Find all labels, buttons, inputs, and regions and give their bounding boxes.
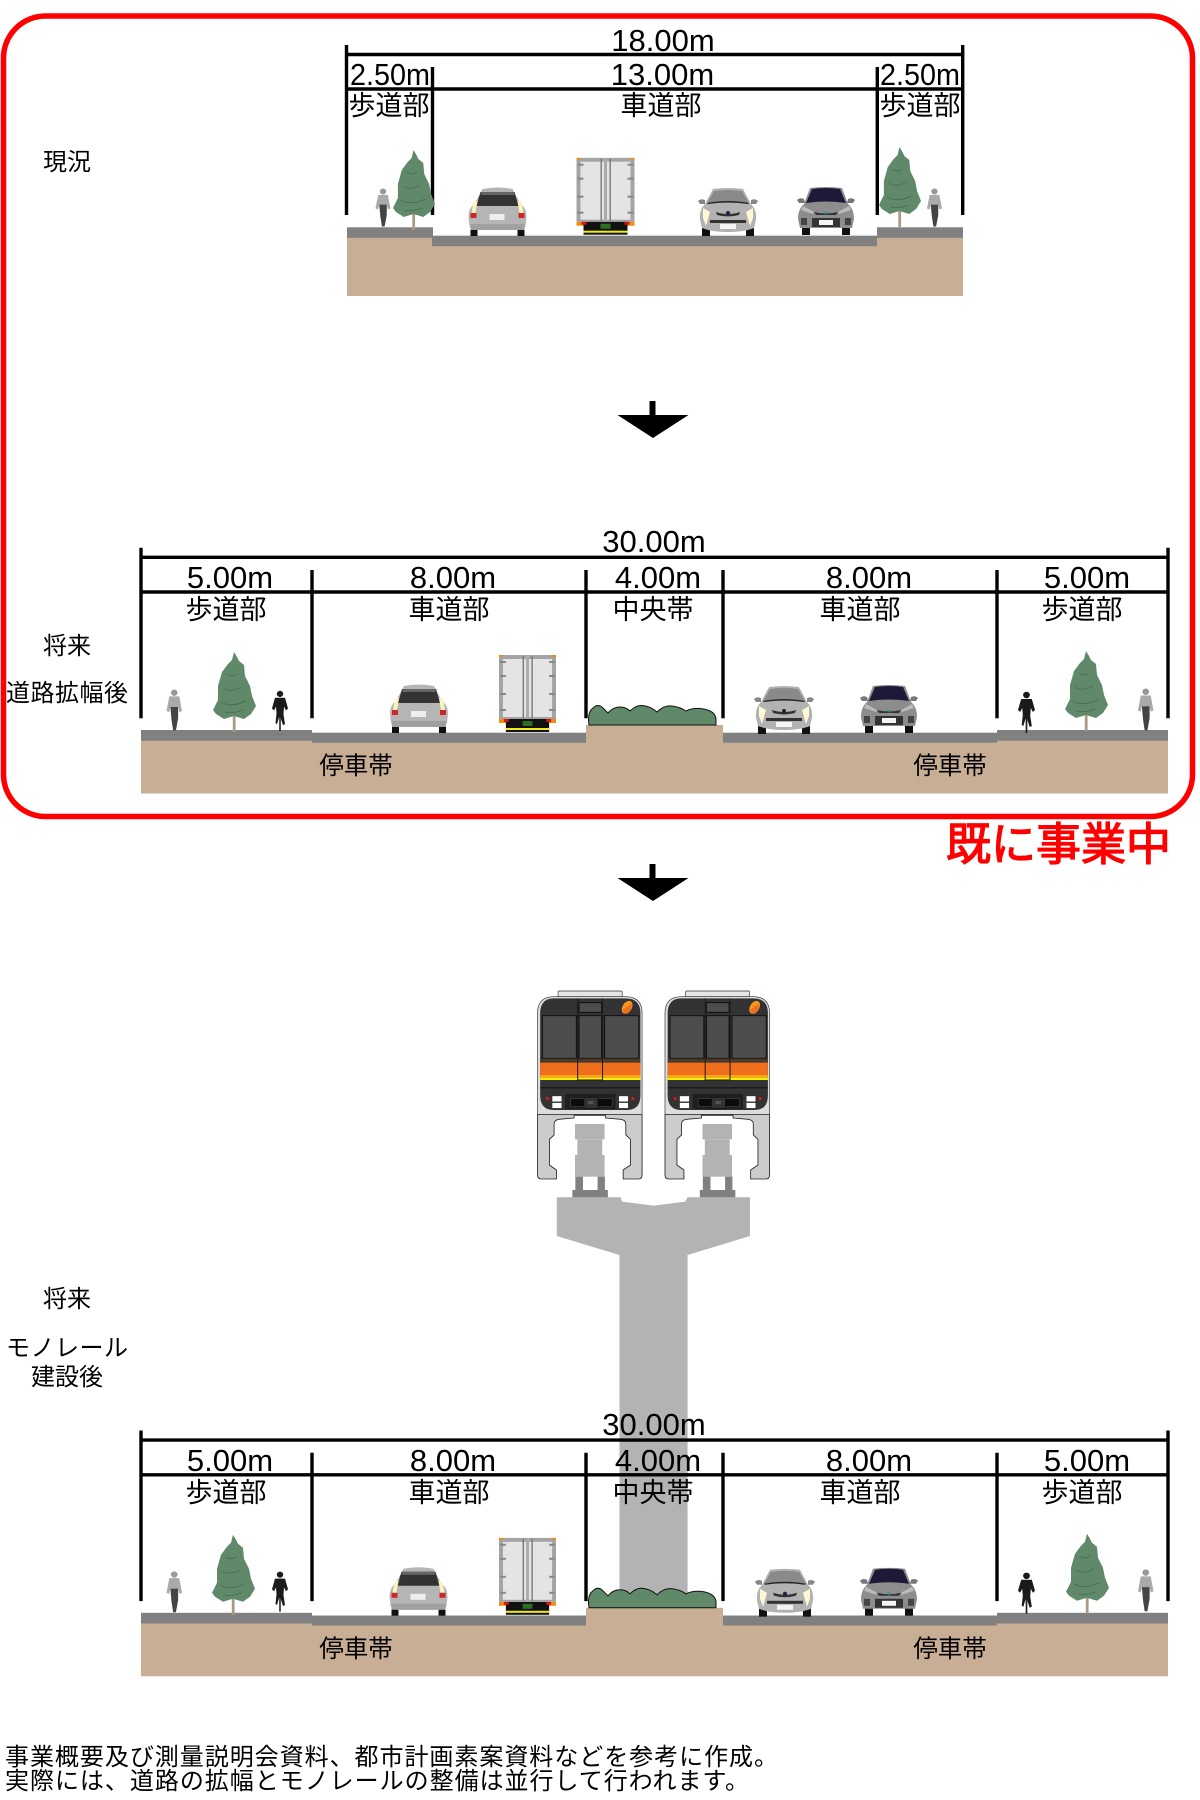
median shrubs	[588, 705, 716, 725]
arrow: widened to monorail	[618, 864, 688, 901]
dimension: median: 4.00m	[615, 560, 701, 595]
pier and pillar	[557, 1197, 750, 1607]
pedestrian	[376, 188, 390, 227]
car rear view	[468, 188, 526, 236]
footer note	[5, 1737, 778, 1796]
label: right stopping lane: 停車帯	[913, 747, 987, 782]
tree	[212, 1535, 255, 1615]
dimension: right carriageway: 8.00m	[826, 1443, 912, 1478]
tree	[1065, 651, 1108, 731]
footer line 2: 実際には、道路の拡幅とモノレールの整備は並行して行われます。	[5, 1761, 749, 1796]
footer line 1: 事業概要及び測量説明会資料、都市計画素案資料などを参考に作成。	[5, 1737, 778, 1772]
pedestrian	[927, 188, 942, 227]
dimension: right sidewalk: 5.00m	[1044, 1443, 1130, 1478]
cyclist	[272, 1572, 288, 1612]
truck	[499, 1538, 556, 1615]
dimension: median: 4.00m	[615, 1443, 701, 1478]
car front dark	[797, 187, 855, 235]
dimension: left sidewalk: 2.50m	[350, 57, 430, 92]
label: left carriageway: 車道部	[408, 1471, 490, 1510]
dimension: right sidewalk: 2.50m	[880, 57, 960, 92]
car rear view	[390, 684, 448, 733]
truck	[576, 158, 634, 235]
red outline: project already under way	[4, 16, 1192, 816]
ground and paving	[141, 1608, 1168, 1676]
dimension: left carriageway: 8.00m	[410, 1443, 496, 1478]
pedestrian	[166, 690, 182, 730]
section: current road	[43, 23, 963, 296]
left train	[538, 991, 642, 1197]
dimension: carriageway: 13.00m	[611, 57, 714, 92]
truck	[499, 655, 556, 732]
label: left sidewalk: 歩道部	[186, 1471, 266, 1510]
dimension lines	[141, 548, 1168, 718]
label: after widening: 道路拡幅後	[6, 673, 128, 708]
label: right sidewalk: 歩道部	[1042, 588, 1122, 627]
cyclist	[1018, 1573, 1035, 1614]
label: right carriageway: 車道部	[820, 588, 900, 627]
dimension: total width: 18.00m	[611, 23, 715, 58]
section: future with monorail	[6, 1279, 1168, 1676]
ground and paving	[141, 725, 1168, 794]
label: median: 中央帯	[612, 1471, 694, 1510]
label: left sidewalk: 歩道部	[348, 84, 430, 123]
label: carriageway: 車道部	[620, 84, 702, 123]
tree	[213, 652, 256, 732]
label: after construction: 建設後	[31, 1357, 103, 1392]
tree	[1066, 1534, 1109, 1614]
arrow: current to widened	[618, 401, 688, 438]
label: future: 将来	[43, 1279, 91, 1314]
label: median: 中央帯	[612, 588, 694, 627]
dimension lines	[141, 1430, 1168, 1601]
car front dark	[860, 1568, 918, 1616]
dimension: right carriageway: 8.00m	[826, 560, 912, 595]
monorail trains and pier	[538, 991, 770, 1607]
label: future: 将来	[43, 626, 91, 661]
label: left stopping lane: 停車帯	[319, 747, 393, 782]
pedestrian	[1138, 689, 1154, 730]
section: future widened road	[6, 524, 1168, 794]
cyclist	[272, 691, 288, 731]
dimension: total width: 30.00m	[602, 1407, 706, 1442]
label: right sidewalk: 歩道部	[1042, 1471, 1122, 1510]
dimension: total width: 30.00m	[602, 524, 706, 559]
label: left stopping lane: 停車帯	[319, 1630, 393, 1665]
label: current state: 現況	[43, 142, 91, 177]
pedestrian	[1138, 1569, 1154, 1611]
label: left carriageway: 車道部	[408, 588, 490, 627]
road cross-section	[141, 1407, 1168, 1676]
dimension lines	[346, 45, 963, 215]
car front dark	[860, 685, 918, 733]
median shrubs	[588, 1588, 716, 1608]
label: right carriageway: 車道部	[820, 1471, 900, 1510]
label: right stopping lane: 停車帯	[913, 1630, 987, 1665]
dimension: right sidewalk: 5.00m	[1044, 560, 1130, 595]
callout: already under way: 既に事業中	[946, 808, 1171, 873]
label: monorail: モノレール	[6, 1328, 128, 1363]
tree	[879, 147, 921, 227]
ground and paving	[347, 227, 963, 296]
car rear view	[390, 1567, 448, 1616]
cyclist	[1018, 692, 1035, 733]
right train	[665, 991, 770, 1197]
dimension: left sidewalk: 5.00m	[187, 560, 273, 595]
tree	[393, 150, 435, 230]
dimension: left carriageway: 8.00m	[410, 560, 496, 595]
car front silver	[755, 1569, 815, 1617]
label: right sidewalk: 歩道部	[880, 84, 960, 123]
car front silver	[698, 188, 758, 236]
pedestrian	[166, 1571, 182, 1612]
dimension: left sidewalk: 5.00m	[187, 1443, 273, 1478]
car front silver	[754, 686, 814, 734]
label: left sidewalk: 歩道部	[186, 588, 266, 627]
